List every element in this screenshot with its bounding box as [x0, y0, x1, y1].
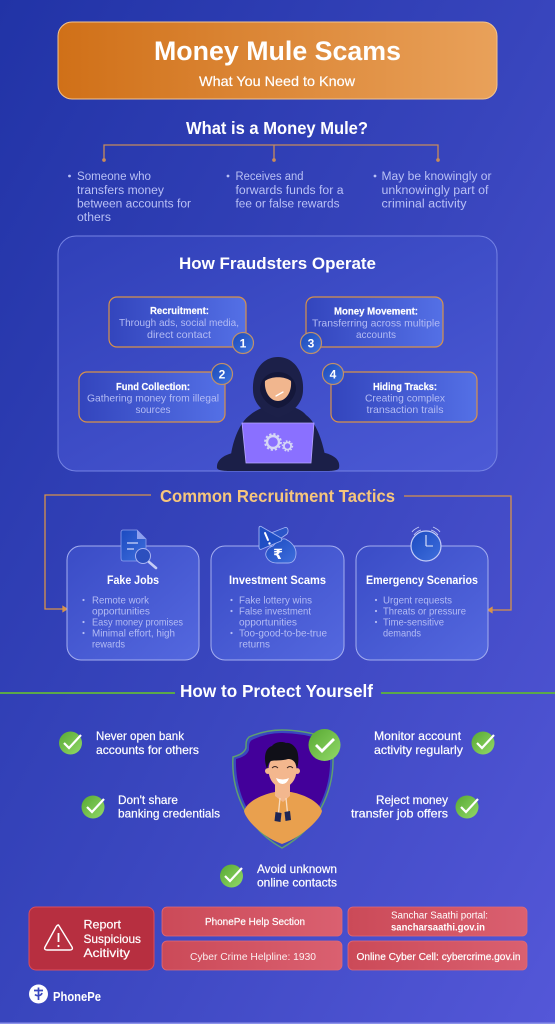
- heading: how to protect yourself: How to Protect Yourself: [180, 681, 373, 701]
- link: online cyber cell: [348, 941, 527, 970]
- card: fake jobs: Remote work: [92, 594, 150, 606]
- card: hiding tracks: transaction trails: [366, 404, 444, 416]
- definition: column 1: [68, 171, 191, 224]
- definition: column 2: Receives and: [236, 171, 304, 183]
- logo: phonepe: [29, 984, 101, 1004]
- tip: monitor account activity: activity regularly: [374, 743, 463, 757]
- card: fund collection: sources: [136, 404, 170, 416]
- card: money movement: accounts: [356, 329, 396, 341]
- divider: bottom edge: [0, 1022, 555, 1024]
- link: cyber crime helpline: [162, 941, 342, 970]
- definition: column 1: transfers money: [77, 185, 164, 197]
- link: sanchar saathi portal: Sanchar Saathi portal:: [391, 910, 488, 922]
- tip: avoid unknown contacts: online contacts: [257, 876, 337, 890]
- tip: never open bank accounts: [59, 729, 199, 757]
- card: emergency scenarios: Time-sensitive: [383, 616, 444, 628]
- card: investment scams: False investment: [239, 606, 311, 618]
- divider: left green rule: [0, 692, 175, 694]
- card: investment scams: [211, 546, 344, 660]
- tip: don't share credentials: [82, 793, 220, 820]
- callout: report suspicious activity: Report: [84, 918, 122, 932]
- card: hiding tracks: [331, 372, 477, 422]
- callout: report suspicious activity: Acitivity: [84, 946, 130, 960]
- definition: column 1: Someone who: [77, 171, 151, 183]
- card: emergency scenarios: demands: [383, 628, 421, 640]
- badge 3: [300, 332, 322, 354]
- panel heading: How Fraudsters Operate: [179, 255, 376, 273]
- tip: never open bank accounts: accounts for others: [96, 743, 199, 757]
- badge 2: [212, 364, 232, 384]
- tip: reject money transfer offers: [351, 793, 478, 820]
- definition: column 3: unknowingly part of: [382, 185, 489, 197]
- card: emergency scenarios: [356, 546, 488, 660]
- link: phonepe help section: [162, 907, 342, 936]
- card: fund collection: Gathering money from illegal: [87, 392, 219, 404]
- card: investment scams: Fake lottery wins: [239, 594, 312, 606]
- card: fake jobs: rewards: [92, 638, 125, 650]
- card: fund collection: [79, 372, 225, 422]
- definition: column 3: criminal activity: [382, 198, 467, 210]
- connector: three-way bracket: [103, 145, 439, 161]
- badge 1: 1: [240, 336, 247, 350]
- definition: column 2: [227, 171, 344, 210]
- card: money movement: Money Movement:: [334, 306, 418, 318]
- icon: alarm clock: [411, 527, 441, 561]
- subtitle: What You Need to Know: [199, 73, 356, 89]
- link: sanchar saathi portal: sancharsaathi.gov.in: [391, 922, 485, 934]
- card: money movement: Transferring across multiple: [312, 318, 440, 330]
- tip: avoid unknown contacts: Avoid unknown: [257, 862, 337, 876]
- tip: avoid unknown contacts: [220, 862, 337, 890]
- definition: column 2: forwards funds for a: [236, 185, 344, 197]
- card: recruitment: direct contact: [147, 329, 211, 341]
- arrow: right bracket: [404, 496, 511, 612]
- card: fake jobs: Minimal effort, high: [92, 628, 175, 640]
- card: fake jobs: [67, 546, 199, 660]
- card: fake jobs: Fake Jobs: [107, 573, 159, 587]
- card: fake jobs: Easy money promises: [92, 616, 183, 628]
- tip: don't share credentials: banking credentials: [118, 806, 220, 820]
- card: recruitment: Recruitment:: [150, 305, 209, 317]
- card: fund collection: Fund Collection:: [116, 381, 190, 393]
- callout: report suspicious activity: [29, 907, 154, 970]
- link: sanchar saathi portal: [348, 907, 527, 936]
- card: emergency scenarios: Emergency Scenarios: [366, 573, 478, 587]
- arrow: left bracket: [45, 495, 151, 612]
- illustration: hooded fraudster at laptop: [217, 357, 339, 471]
- card: recruitment: Through ads, social media,: [119, 317, 239, 329]
- divider: right green rule: [381, 692, 555, 694]
- badge 3: 3: [308, 336, 315, 350]
- badge 2: 2: [219, 368, 226, 382]
- tip: monitor account activity: [374, 729, 494, 757]
- tip: reject money transfer offers: Reject money: [376, 793, 448, 807]
- definition: column 1: others: [77, 212, 111, 224]
- icon: warning and rupee: ₹: [273, 547, 283, 563]
- icon: warning triangle: [45, 925, 72, 950]
- panel: how fraudsters operate: [58, 236, 497, 471]
- badge 4: 4: [330, 368, 337, 382]
- illustration: person in shield: [233, 730, 333, 848]
- card: investment scams: returns: [239, 638, 270, 650]
- heading: what is a money mule: What is a Money Mule?: [186, 118, 368, 138]
- card: recruitment: [109, 297, 246, 347]
- card: emergency scenarios: Urgent requests: [383, 594, 452, 606]
- badge 1: [232, 332, 254, 354]
- callout: report suspicious activity: Suspicious: [84, 932, 141, 946]
- title banner: [58, 22, 497, 99]
- link: phonepe help section: PhonePe Help Section: [205, 917, 305, 928]
- heading: common recruitment tactics: Common Recruitment Tactics: [160, 486, 395, 506]
- link: cyber crime helpline: Cyber Crime Helpline: 1930: [190, 952, 316, 963]
- logo: phonepe: PhonePe: [53, 990, 101, 1004]
- tip: never open bank accounts: Never open bank: [96, 729, 185, 743]
- badge 4: [322, 364, 344, 384]
- icon: warning and rupee: [259, 526, 296, 563]
- link: online cyber cell: Online Cyber Cell: cybercrime.gov.in: [356, 952, 520, 963]
- card: investment scams: Investment Scams: [229, 573, 326, 587]
- card: investment scams: opportunities: [239, 616, 297, 628]
- card: investment scams: Too-good-to-be-true: [239, 628, 327, 640]
- card: fake jobs: opportunities: [92, 606, 150, 618]
- definition: column 3: May be knowingly or: [382, 171, 492, 183]
- card: hiding tracks: Creating complex: [365, 392, 446, 404]
- tip: reject money transfer offers: transfer job offers: [351, 806, 448, 820]
- definition: column 2: fee or false rewards: [236, 198, 340, 210]
- icon: large shield check: [308, 729, 340, 761]
- card: emergency scenarios: Threats or pressure: [383, 606, 466, 618]
- card: hiding tracks: Hiding Tracks:: [373, 381, 437, 393]
- definition: column 3: [374, 171, 492, 210]
- definition: column 1: between accounts for: [77, 198, 191, 210]
- title: Money Mule Scams: [154, 36, 401, 66]
- card: money movement: [306, 297, 443, 347]
- tip: monitor account activity: Monitor account: [374, 729, 462, 743]
- icon: document with magnifier: [121, 530, 156, 568]
- tip: don't share credentials: Don't share: [118, 793, 178, 807]
